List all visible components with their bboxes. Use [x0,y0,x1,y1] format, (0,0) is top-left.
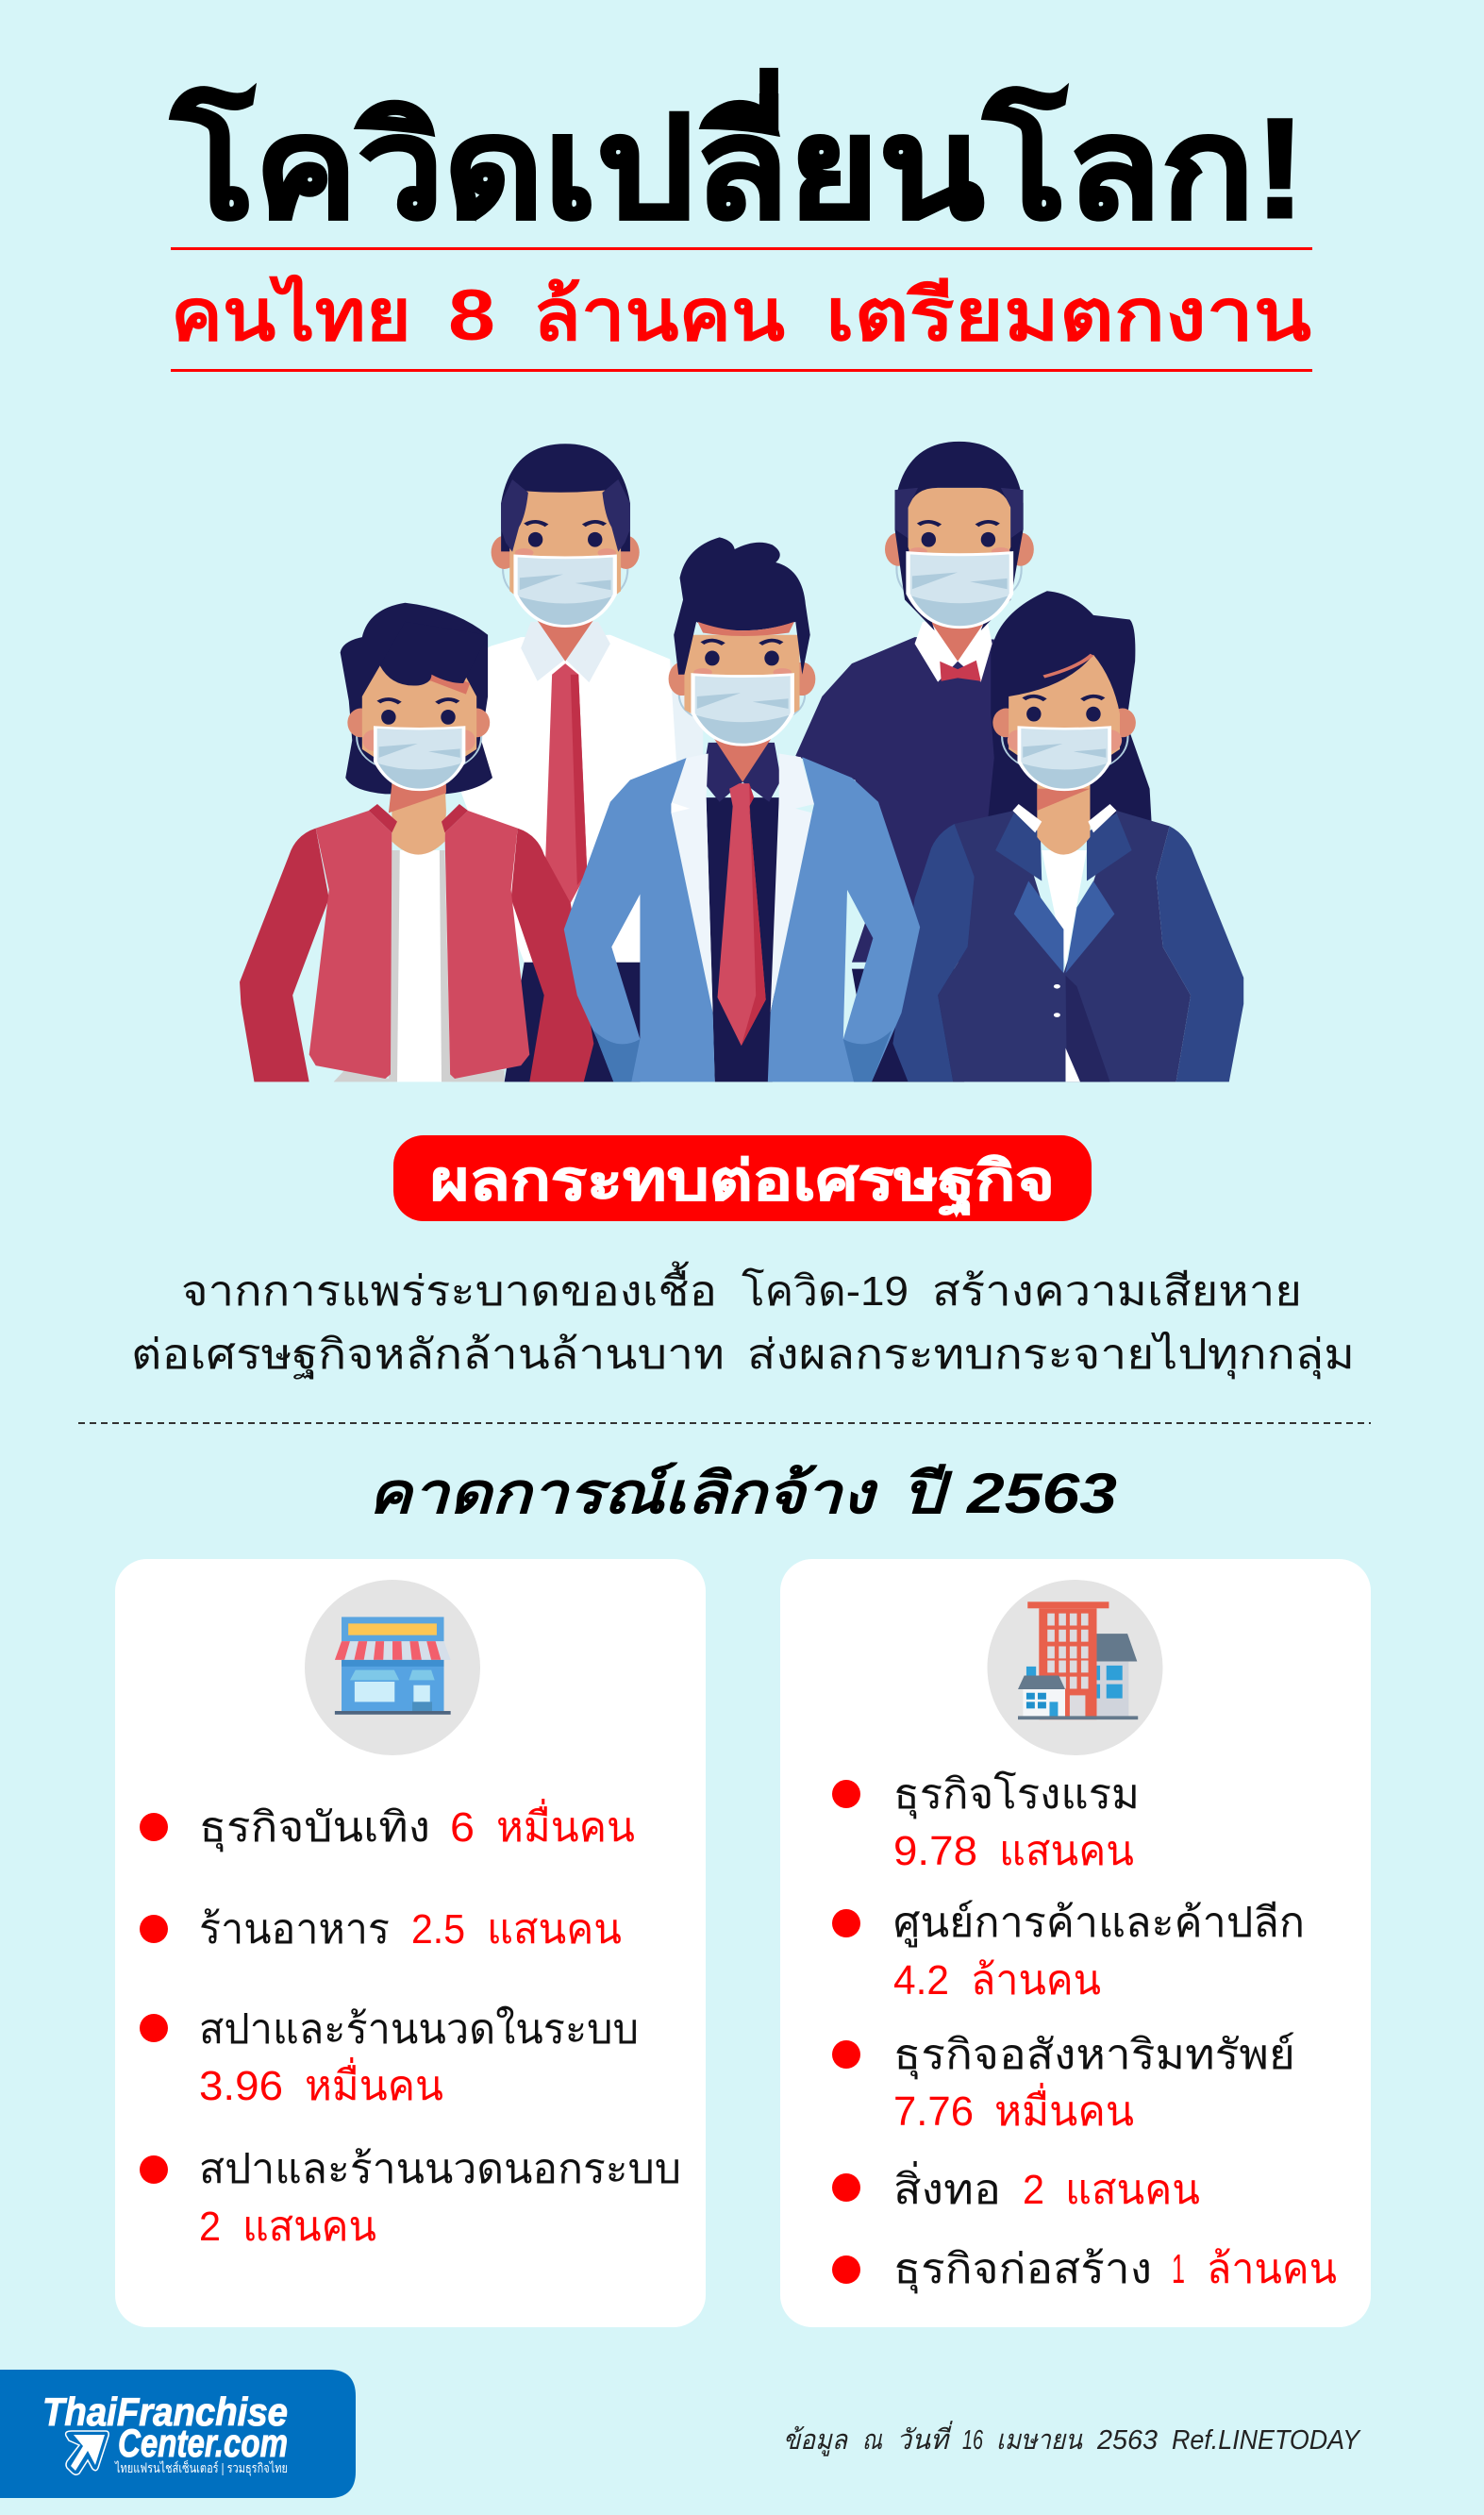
person: front right woman [892,591,1243,1081]
title: โควิดเปลี่ยนโลก! [170,69,1306,247]
list item: retail [832,1900,1305,2004]
list item: restaurant: 2.5 [411,1906,465,1953]
source note: ณ [862,2425,883,2456]
list item: retail: ล้านคน [971,1957,1101,2004]
icon: arrow [66,2431,108,2474]
subtitle: คนไทย [171,274,411,356]
subtitle: 8 [448,276,495,356]
list item: formal spa: 3.96 [199,2063,283,2109]
list item: restaurant: แสนคน [487,1906,622,1953]
list item: entertainment: ธุรกิจบันเทิง [199,1804,430,1853]
person: back right man [795,442,1034,1081]
paragraph: ส่งผลกระทบกระจายไปทุกกลุ่ม [747,1331,1355,1380]
title rule bottom [171,369,1312,372]
list item: informal spa: สปาและร้านนวดนอกระบบ [199,2146,681,2192]
source note: เมษายน [996,2425,1083,2456]
list item: informal spa [140,2146,681,2250]
list item: hotel: ธุรกิจโรงแรม [893,1770,1140,1819]
person: center man [564,537,920,1081]
icon: buildings [987,1580,1162,1755]
source note: วันที่ [896,2421,953,2456]
list item: textiles [832,2160,1200,2213]
source note: 2563 [1096,2425,1158,2456]
list item: construction [832,2246,1337,2294]
list item: restaurant: ร้านอาหาร [199,1906,390,1953]
badge: economic impact [393,1135,1092,1221]
logo: ThaiFranchise Center: ThaiFranchise [42,2389,288,2434]
list item: textiles: 2 [1023,2167,1044,2213]
badge: economic impact: ผลกระทบต่อเศรษฐกิจ [430,1150,1055,1216]
source note: Ref.LINETODAY [1172,2425,1361,2456]
list item: real estate: ธุรกิจอสังหาริมทรัพย์ [893,2032,1295,2080]
list item: retail: ศูนย์การค้าและค้าปลีก [893,1900,1305,1948]
subtitle: เตรียมตกงาน [825,276,1311,356]
source note: ข้อมูล [783,2425,848,2456]
panel: left card [115,1559,706,2327]
list item: textiles: สิ่งทอ [893,2160,1001,2213]
list item: entertainment [140,1798,635,1853]
logo: ThaiFranchise Center: Center.com [118,2421,288,2465]
illustration: five people wearing masks [240,442,1243,1081]
list item: informal spa: แสนคน [242,2204,376,2250]
list item: restaurant [140,1906,622,1953]
paragraph: โควิด-19 [742,1267,909,1315]
list item: hotel: 9.78 [893,1828,977,1874]
title rule top [171,247,1312,250]
list item: entertainment: หมื่นคน [496,1798,635,1851]
logo: ThaiFranchise Center [0,2370,356,2498]
list item: construction: 1 [1172,2246,1185,2292]
list item: construction: ล้านคน [1207,2246,1337,2292]
heading: layoff forecast: 2563 [966,1462,1117,1525]
source note [783,2421,1361,2456]
person: front left woman [240,603,593,1081]
list item: retail: 4.2 [893,1957,949,2004]
list item: informal spa: 2 [199,2204,221,2250]
list item: formal spa: สปาและร้านนวดในระบบ [199,2005,639,2053]
source note: 16 [962,2425,984,2456]
list item: entertainment: 6 [450,1804,475,1851]
list item: textiles: แสนคน [1065,2167,1200,2213]
list item: hotel [832,1770,1140,1874]
paragraph: ต่อเศรษฐกิจหลักล้านล้านบาท [131,1332,725,1379]
heading: layoff forecast [368,1462,1117,1525]
subtitle [171,274,1311,356]
heading: layoff forecast: คาดการณ์เลิกจ้าง [368,1462,878,1525]
list item: formal spa: หมื่นคน [305,2056,443,2109]
list item: real estate [832,2032,1295,2135]
list item: construction: ธุรกิจก่อสร้าง [893,2246,1152,2294]
logo: ThaiFranchise Center: ไทยแฟรนไชส์เซ็นเตอร์ | รวมธุรกิจไทย [114,2459,288,2476]
list item: real estate: หมื่นคน [994,2082,1134,2135]
heading: layoff forecast: ปี [902,1462,953,1525]
person: back left man [461,444,703,1081]
panel: right card [780,1559,1371,2327]
paragraph: สร้างความเสียหาย [932,1268,1302,1315]
list item: real estate: 7.76 [893,2088,974,2135]
paragraph: จากการแพร่ระบาดของเชื้อ [181,1261,717,1315]
icon: shop [305,1580,480,1755]
list item: hotel: แสนคน [999,1828,1134,1874]
subtitle: ล้านคน [533,276,785,356]
list item: formal spa [140,2005,639,2109]
paragraph [131,1261,1355,1380]
